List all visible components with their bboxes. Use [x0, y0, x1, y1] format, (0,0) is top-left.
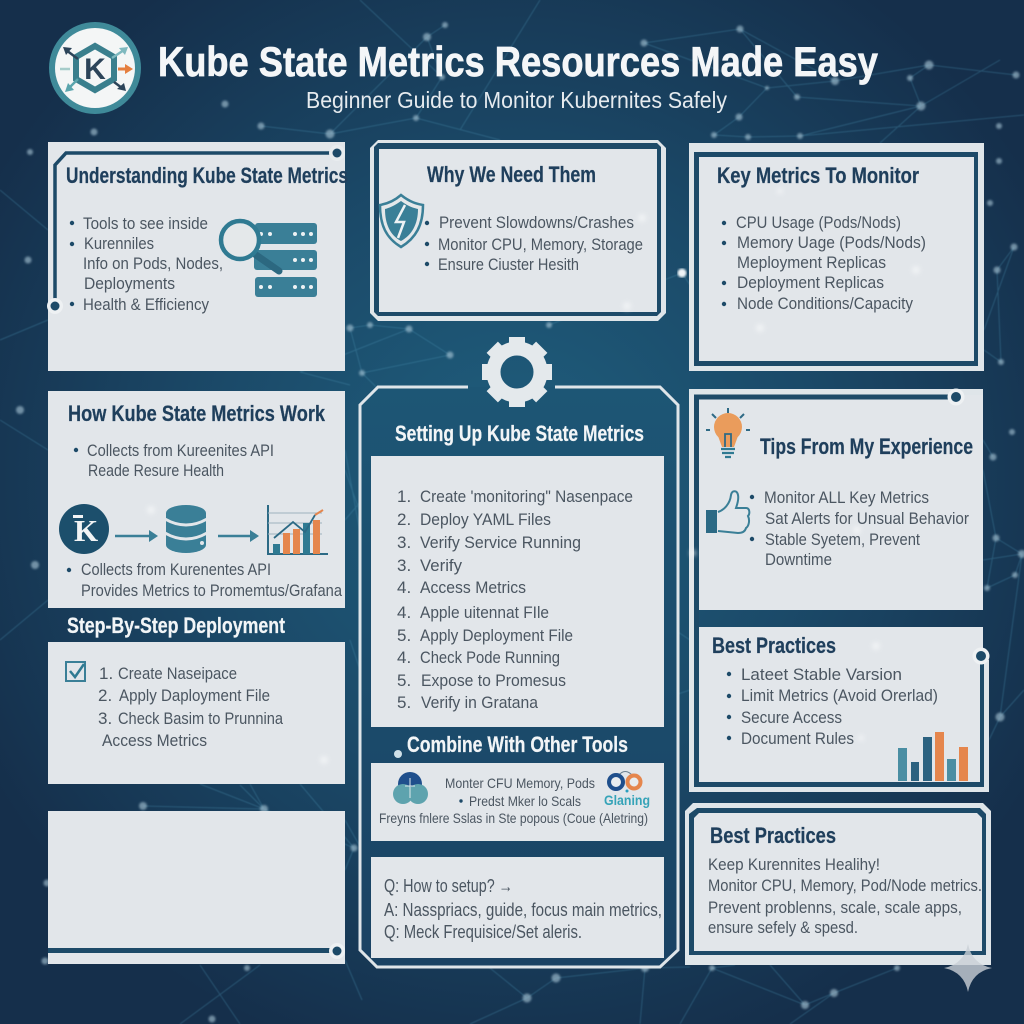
panel: tips from my experience [689, 388, 983, 610]
icon: kubernetes logo [49, 22, 141, 114]
sub-panel: setup steps: 5. [397, 671, 411, 690]
icon: prometheus cloud [393, 772, 428, 804]
text block: bullets: Ensure Ciuster Hesith [438, 255, 579, 274]
icon: k badge: K [74, 513, 98, 548]
text block: bullets: Node Conditions/Capacity [737, 294, 913, 313]
sub-panel: setup steps: Verify Service Running [420, 533, 581, 552]
text block: bullets [425, 213, 643, 274]
text block: top bullets: Reade Resure Health [88, 461, 224, 480]
text block: bullets: Document Rules [741, 729, 854, 748]
text block: combine text: Monter CFU Memory, Pods [445, 775, 595, 791]
sub-panel: faq [371, 857, 664, 958]
text block: summary: ensure sefely & spesd. [708, 918, 858, 937]
text block: steps: Create Naseipace [118, 664, 237, 683]
text block: lower bullets: Collects from Kurenentes API [81, 560, 271, 579]
icon: database [165, 505, 207, 553]
text block: summary [708, 855, 982, 937]
icon: light bulb [706, 408, 750, 457]
text block: bullets: Deployment Replicas [737, 273, 884, 292]
sub-panel: setup steps: Create 'monitoring" Nasenpace [420, 487, 633, 506]
panel: understanding kube state metrics [47, 142, 348, 371]
subtitle: Beginner Guide to Monitor Kubernites Safely [306, 87, 727, 113]
text block: bullets: Prevent Slowdowns/Crashes [439, 213, 634, 232]
text block: summary: Monitor CPU, Memory, Pod/Node metrics. [708, 876, 982, 895]
icon: grafana logo: Glaning [604, 792, 650, 808]
sub-panel: setup steps: Deploy YAML Files [420, 510, 551, 529]
text block: top bullets: Collects from Kureenites API [87, 441, 274, 460]
text block: bullets: Kurenniles [84, 234, 154, 253]
chart: small bars [898, 732, 968, 781]
text block: bullets: CPU Usage (Pods/Nods) [736, 213, 901, 232]
sub-panel: faq: Q: Meck Frequisice/Set aleris. [384, 922, 582, 942]
text block: bullets: Monitor CPU, Memory, Storage [438, 235, 643, 254]
icon: shield [380, 195, 423, 247]
sub-panel: setup steps: Verify [420, 556, 462, 575]
sub-panel: setup steps: Expose to Promesus [421, 671, 566, 690]
sub-panel: setup steps: Apple uitennat FIle [420, 603, 549, 622]
sub-panel: setup steps: Check Pode Running [420, 648, 560, 667]
sub-panel: setup steps: 5. [397, 693, 411, 712]
text block: lower bullets: Provides Metrics to Promemtus/Grafana [81, 581, 342, 600]
text block: bullets: Deployments [84, 274, 175, 293]
text block: combine text [379, 775, 648, 826]
heading: Why We Need Them [427, 162, 596, 187]
panel: center frame [360, 337, 678, 967]
text block: summary: Keep Kurennites Healihy! [708, 855, 880, 874]
sub-panel: setup steps: 3. [397, 556, 411, 575]
sub-panel: faq: A: Nasspriacs, guide, focus main metrics, [384, 900, 662, 920]
sub-panel: setup steps: 2. [397, 510, 411, 529]
chart: growth bars [268, 505, 328, 554]
sub-panel: setup steps: 4. [397, 578, 411, 597]
panel: best practices summary [685, 803, 991, 965]
sub-panel: setup steps: 4. [397, 648, 411, 667]
panel: best practices list [689, 610, 990, 792]
panel: how kube state metrics work [48, 391, 345, 608]
text block: bullets: Stable Syetem, Prevent [765, 530, 920, 549]
text block: bullets: Downtime [765, 550, 832, 569]
text block: bullets: Limit Metrics (Avoid Orerlad) [741, 686, 938, 705]
text block: bullets [727, 665, 938, 748]
sub-panel: setup steps: 4. [397, 603, 411, 622]
panel: key metrics to monitor [689, 143, 984, 371]
text block: top bullets [74, 441, 274, 480]
text block: steps: Apply Daployment File [119, 686, 270, 705]
text block: combine text: Freyns fnlere Sslas in Ste popous (Coue (Aletring) [379, 810, 648, 826]
heading: step-by-step deployment: Step-By-Step Deployment [67, 613, 285, 638]
icon: gear [482, 337, 552, 407]
text block: steps: Check Basim to Prunnina [118, 709, 283, 728]
text block: bullets: Meployment Replicas [737, 253, 886, 272]
text block: bullets: Info on Pods, Nodes, [83, 254, 223, 273]
sub-panel: setup steps: Verify in Gratana [421, 693, 538, 712]
text block: steps: 1. [99, 664, 113, 683]
text block: bullets: Lateet Stable Varsion [741, 665, 902, 684]
heading: setting up: Setting Up Kube State Metrics [395, 421, 644, 446]
title: Kube State Metrics Resources Made Easy [158, 38, 879, 85]
sub-panel: setup steps: 1. [397, 487, 411, 506]
icon: checkbox [66, 662, 85, 681]
icon: grafana logo [604, 772, 650, 808]
text block: combine text: Predst Mker lo Scals [469, 793, 581, 809]
text block: steps: 2. [98, 686, 112, 705]
icon: kubernetes logo: K [84, 53, 106, 86]
sub-panel: setup steps: 3. [397, 533, 411, 552]
heading: Key Metrics To Monitor [717, 163, 919, 188]
heading: Best Practices [712, 633, 836, 658]
arrow [115, 530, 158, 542]
text block: bullets: Sat Alerts for Unsual Behavior [765, 509, 969, 528]
heading: Best Practices [710, 823, 836, 848]
text block: bullets: Health & Efficiency [83, 295, 209, 314]
text block: bullets: Memory Uage (Pods/Nods) [737, 233, 926, 252]
icon: k badge [59, 504, 109, 554]
panel: step-by-step deployment [48, 642, 345, 784]
text block: bullets: Monitor ALL Key Metrics [764, 488, 929, 507]
icon: sparkle [944, 944, 992, 992]
text block: summary: Prevent problenns, scale, scale apps, [708, 898, 962, 917]
text block: bullets [722, 213, 926, 313]
icon: magnifier over servers [221, 221, 317, 297]
text block: bullets: Secure Access [741, 708, 842, 727]
text block: lower bullets [67, 560, 342, 600]
heading: How Kube State Metrics Work [68, 401, 325, 426]
icon: thumbs up [706, 491, 749, 533]
sub-panel: setup steps: Access Metrics [420, 578, 526, 597]
sub-panel: faq: Q: How to setup? → [384, 876, 513, 896]
sub-panel: setup steps [371, 456, 664, 727]
heading: Understanding Kube State Metrics [66, 163, 348, 188]
text block: bullets [750, 488, 969, 569]
panel: why we need them [370, 140, 666, 321]
heading: combine with other tools: Combine With Other Tools [407, 732, 628, 757]
panel: blank bottom left [48, 811, 345, 964]
sub-panel: setup steps: 5. [397, 626, 411, 645]
text block: steps [98, 664, 283, 750]
sub-panel: setup steps: Apply Deployment File [420, 626, 573, 645]
text block: steps: 3. [98, 709, 112, 728]
text block: steps: Access Metrics [102, 731, 207, 750]
text block: bullets [70, 214, 223, 314]
text block: bullets: Tools to see inside [83, 214, 208, 233]
sub-panel: combine tools [371, 763, 664, 841]
arrow [218, 530, 259, 542]
